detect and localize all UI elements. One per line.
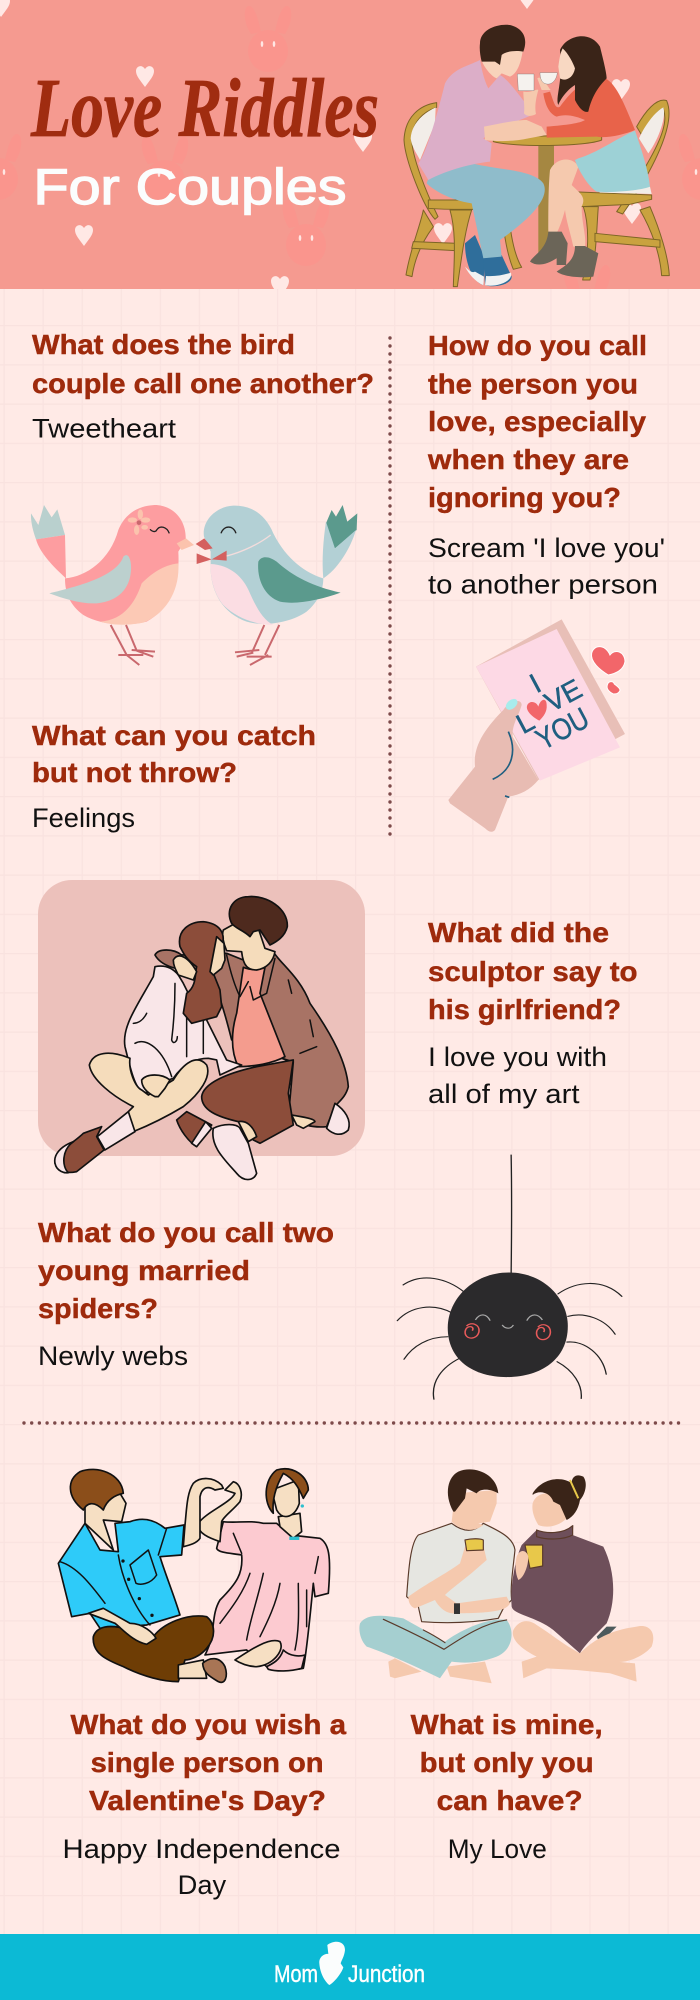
footer band (0, 1934, 700, 2000)
riddle: catch but not throw: Feelings (32, 803, 135, 833)
pink bird (31, 505, 194, 665)
riddle: sculptor: his girlfriend? (428, 994, 621, 1025)
dotted vertical divider (388, 338, 392, 837)
boy jacket and shirt (155, 950, 348, 1127)
boy trousers (202, 1060, 293, 1143)
blue bird (196, 505, 357, 665)
man arm (408, 1545, 510, 1613)
pink rounded panel (38, 880, 365, 1156)
riddle: ignoring you (427, 330, 665, 600)
riddle: sculptor: What did the (428, 917, 609, 948)
riddle: bird couple (32, 329, 374, 444)
boy arm and hand (88, 1608, 156, 1644)
riddle: married spiders (38, 1217, 334, 1371)
illustration: couple making heart with arms (58, 1469, 330, 1682)
girl hoodie (125, 966, 242, 1093)
riddle: single person: Happy Independence (62, 1834, 340, 1864)
riddle: single person (62, 1709, 347, 1900)
riddle: mine but only you: but only you (420, 1747, 594, 1778)
decorative rabbits (0, 6, 700, 331)
card lettering (511, 668, 595, 757)
girl dress (205, 1522, 330, 1671)
girl hand (142, 1075, 170, 1097)
riddle: ignoring you: ignoring you? (428, 482, 621, 513)
illustration: kissing couple on pink panel (38, 880, 365, 1180)
spider legs (397, 1278, 622, 1399)
card lettering: YOU (531, 702, 595, 757)
riddle: mine but only you: My Love (448, 1834, 547, 1864)
spider face (465, 1315, 550, 1340)
riddle: bird couple: Tweetheart (32, 414, 177, 444)
riddle: ignoring you: the person you (428, 368, 638, 400)
woman sweater (511, 1525, 613, 1653)
card lettering: I (525, 668, 546, 699)
girl hair (179, 922, 223, 1023)
boy head (223, 897, 287, 970)
title: Love Riddles: Love Riddles (30, 62, 379, 155)
illustration: hanging spider (397, 1155, 622, 1399)
riddle: married spiders: young married (38, 1255, 250, 1286)
riddle: catch but not throw: What can you catch (32, 720, 316, 751)
riddle: ignoring you: love, especially (428, 406, 647, 437)
man head (448, 1469, 498, 1530)
woman (530, 36, 650, 277)
man feet and trousers (359, 1616, 512, 1683)
riddle: mine but only you (411, 1709, 603, 1864)
boy arm (183, 1479, 223, 1547)
riddle: single person: What do you wish a (70, 1709, 347, 1740)
boy head (70, 1469, 126, 1550)
riddle: ignoring you: Scream 'I love you' (428, 533, 665, 563)
boy foot and shoe (178, 1660, 207, 1678)
girl arm (198, 1482, 241, 1542)
left chair (404, 103, 522, 287)
dotted horizontal divider (24, 1421, 683, 1425)
riddle: married spiders: What do you call two (38, 1217, 334, 1248)
boy feet and shoes (177, 1103, 349, 1180)
right chair (570, 100, 669, 280)
header banner (0, 0, 700, 289)
boy blue shirt (58, 1519, 184, 1628)
girl shoe and sock (55, 1112, 135, 1173)
spider body (448, 1272, 568, 1377)
riddle: single person: single person on (91, 1747, 324, 1778)
logo wordmark: Junction: Junction (348, 1961, 425, 1988)
riddle: catch but not throw: but not throw? (32, 757, 237, 788)
riddle: married spiders: spiders? (38, 1293, 158, 1324)
girl legs (89, 1053, 208, 1132)
riddle: bird couple: What does the bird (32, 329, 295, 360)
illustration: couple at cafe table (404, 25, 669, 287)
title: For Couples: For Couples (34, 159, 346, 215)
woman mug and hand (516, 1545, 543, 1580)
riddle: bird couple: couple call one another? (32, 368, 374, 399)
riddle: sculptor: I love you with (428, 1042, 607, 1072)
spider thread (510, 1155, 513, 1274)
man (418, 25, 547, 286)
woman legs (513, 1621, 653, 1682)
decorative hearts (0, 0, 641, 297)
riddle: mine but only you: can have? (437, 1785, 583, 1816)
illustration: couple sitting with mugs (359, 1469, 653, 1683)
riddle: single person: Valentine's Day? (89, 1785, 326, 1816)
riddle: married spiders: Newly webs (38, 1341, 188, 1371)
girl head (266, 1469, 308, 1540)
riddle: catch but not throw (32, 720, 316, 833)
logo wordmark: Mom: Mom (274, 1961, 318, 1988)
riddle: sculptor: all of my art (428, 1079, 580, 1109)
riddle: sculptor (428, 917, 638, 1109)
illustration: hand holding love card (448, 619, 625, 832)
boy trousers (93, 1616, 214, 1682)
illustration: two kissing birds (31, 505, 357, 665)
logo icon: mother and child (319, 1942, 345, 1985)
riddle: ignoring you: when they are (427, 444, 629, 475)
riddle: sculptor: sculptor say to (428, 956, 638, 987)
girl hand on shoulder (173, 956, 197, 980)
riddle: single person: Day (178, 1870, 227, 1900)
man tee (407, 1523, 515, 1623)
riddle: mine but only you: What is mine, (411, 1709, 603, 1740)
woman head and bun (532, 1475, 586, 1527)
table (493, 133, 602, 255)
riddle: ignoring you: to another person (428, 570, 658, 600)
riddle: ignoring you: How do you call (428, 330, 647, 361)
footer logo (274, 1942, 425, 1988)
card lettering: L (511, 705, 539, 740)
card lettering: VE (539, 673, 587, 718)
